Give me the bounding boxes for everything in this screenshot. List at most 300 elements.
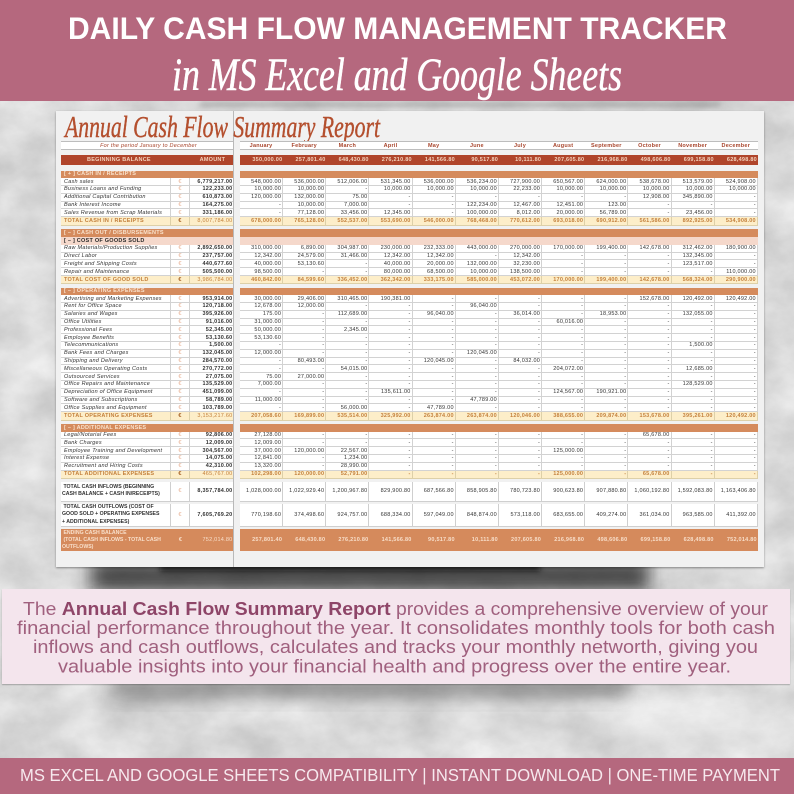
section: operating expenses: € bbox=[178, 405, 182, 411]
section: cash in / receipts: - bbox=[452, 210, 454, 216]
beginning balance row: 207,605.80 bbox=[554, 157, 584, 163]
section: operating expenses: 30,000.00 bbox=[254, 296, 281, 302]
section: operating expenses: - bbox=[322, 389, 324, 395]
beginning balance row: 628,498.80 bbox=[727, 157, 757, 163]
description text bbox=[17, 599, 775, 676]
description text: inflows and cash outflows, calculates and tracks your monthly networth, giving you bbox=[33, 637, 758, 657]
section: operating expenses: 132,045.00 bbox=[202, 350, 232, 356]
section: operating expenses: 132,055.00 bbox=[683, 311, 713, 317]
section: operating expenses: - bbox=[452, 342, 454, 348]
section: additional expenses: - bbox=[409, 455, 411, 461]
section: cash in / receipts: Sales Revenue from Scrap Materials bbox=[64, 210, 162, 216]
beginning balance row: 257,801.40 bbox=[296, 157, 326, 163]
section: additional expenses: € bbox=[178, 448, 182, 454]
section: additional expenses: 1,234.00 bbox=[344, 455, 367, 461]
section: additional expenses: € bbox=[178, 455, 182, 461]
section: cash out / cost of goods sold: - bbox=[365, 269, 367, 275]
section: additional expenses: 120,000.00 bbox=[294, 471, 324, 477]
section: additional expenses: Bank Charges bbox=[64, 440, 102, 446]
section: operating expenses: 953,914.00 bbox=[202, 296, 232, 302]
section: cash out / cost of goods sold: 3,986,784.00 bbox=[197, 277, 232, 283]
section: operating expenses: - bbox=[581, 358, 583, 364]
section: operating expenses: - bbox=[624, 358, 626, 364]
section: cash out / cost of goods sold: - bbox=[365, 261, 367, 267]
section: cash in / receipts: - bbox=[452, 194, 454, 200]
section: cash in / receipts: 534,908.00 bbox=[726, 218, 756, 224]
section: operating expenses: 325,992.00 bbox=[381, 413, 411, 419]
section: cash out / cost of goods sold: Freight and Shipping Costs bbox=[64, 261, 137, 267]
section: cash out / cost of goods sold: 312,462.00 bbox=[683, 245, 713, 251]
section: operating expenses: - bbox=[452, 374, 454, 380]
section: cash in / receipts: - bbox=[667, 210, 670, 216]
section: cash in / receipts: 6,779,217.00 bbox=[197, 179, 232, 185]
section: operating expenses: 190,381.00 bbox=[381, 296, 411, 302]
section: additional expenses: - bbox=[409, 463, 411, 469]
section: operating expenses: - bbox=[667, 397, 670, 403]
section: operating expenses: - bbox=[754, 397, 756, 403]
section: operating expenses: - bbox=[581, 342, 583, 348]
section: operating expenses: - bbox=[538, 397, 540, 403]
section: operating expenses: 124,567.00 bbox=[553, 389, 583, 395]
section: operating expenses: 29,406.00 bbox=[298, 296, 324, 302]
section: additional expenses: - bbox=[754, 471, 756, 477]
section: cash out / cost of goods sold: 333,175.00 bbox=[424, 277, 454, 283]
section: cash out / cost of goods sold: - bbox=[711, 269, 713, 275]
section: operating expenses: - bbox=[452, 381, 454, 387]
section: additional expenses: - bbox=[754, 455, 756, 461]
section: cash out / cost of goods sold: 10,000.00 bbox=[470, 269, 497, 275]
section: additional expenses: Interest Expense bbox=[64, 455, 109, 461]
row: total cash outflows: 374,498.60 bbox=[294, 512, 324, 518]
section: cash out / cost of goods sold: 505,500.00 bbox=[202, 269, 232, 275]
section: cash in / receipts: - bbox=[279, 202, 281, 208]
section: cash in / receipts: 8,012.00 bbox=[517, 210, 540, 216]
period and month header row: October bbox=[638, 142, 661, 148]
section: operating expenses: Office Supplies and Equipment bbox=[64, 405, 147, 411]
section: operating expenses: - bbox=[667, 389, 670, 395]
section: operating expenses: - bbox=[495, 335, 497, 341]
section: operating expenses: € bbox=[178, 389, 182, 395]
section: operating expenses: 50,000.00 bbox=[254, 327, 281, 333]
section: additional expenses: - bbox=[322, 455, 324, 461]
section: cash in / receipts: 122,234.00 bbox=[467, 202, 497, 208]
section: operating expenses: - bbox=[538, 319, 540, 325]
section: cash out / cost of goods sold: 310,000.00 bbox=[251, 245, 281, 251]
section: operating expenses: - bbox=[667, 381, 670, 387]
period and month header row: June bbox=[470, 142, 484, 148]
section: operating expenses: Software and Subscriptions bbox=[64, 397, 137, 403]
section: operating expenses: - bbox=[711, 350, 713, 356]
section: operating expenses: € bbox=[178, 311, 182, 317]
section: operating expenses: 310,465.00 bbox=[337, 296, 367, 302]
section: operating expenses: - bbox=[452, 366, 454, 372]
description text: valuable insights into your financial health and progress over the entire year. bbox=[58, 656, 731, 676]
section: cash out / cost of goods sold: 40,000.00 bbox=[384, 261, 411, 267]
row: ending cash balance: OUTFLOWS) bbox=[62, 544, 93, 550]
section: operating expenses: - bbox=[667, 303, 670, 309]
section: cash in / receipts: - bbox=[754, 210, 756, 216]
section: operating expenses: € bbox=[178, 381, 182, 387]
section: cash out / cost of goods sold: - bbox=[322, 269, 324, 275]
row: total cash outflows: 683,655.00 bbox=[553, 512, 583, 518]
section: additional expenses: - bbox=[538, 463, 540, 469]
section: cash out / cost of goods sold: 2,892,650.00 bbox=[197, 245, 232, 251]
section: operating expenses: Bank Fees and Charges bbox=[64, 350, 129, 356]
section: operating expenses: 120,492.00 bbox=[726, 413, 756, 419]
section: cash out / cost of goods sold: 290,900.00 bbox=[726, 277, 756, 283]
section: cash in / receipts: 10,000.00 bbox=[557, 186, 583, 192]
section: operating expenses: - bbox=[667, 358, 670, 364]
section: operating expenses: Telecommunications bbox=[64, 342, 118, 348]
section: cash in / receipts: 20,000.00 bbox=[557, 210, 583, 216]
section: operating expenses: - bbox=[495, 342, 497, 348]
section: operating expenses: 2,345.00 bbox=[344, 327, 367, 333]
section: cash in / receipts: € bbox=[178, 202, 182, 208]
section: operating expenses: - bbox=[365, 319, 367, 325]
section: cash in / receipts: 892,925.00 bbox=[683, 218, 713, 224]
section: cash in / receipts: 33,456.00 bbox=[341, 210, 367, 216]
section: operating expenses: 36,014.00 bbox=[513, 311, 540, 317]
section: cash in / receipts: - bbox=[667, 202, 670, 208]
section: cash out / cost of goods sold: - bbox=[581, 261, 583, 267]
section: cash in / receipts: 524,908.00 bbox=[726, 179, 756, 185]
section: additional expenses: - bbox=[711, 448, 713, 454]
section: operating expenses: - bbox=[754, 389, 756, 395]
section: additional expenses: 27,128.00 bbox=[254, 432, 281, 438]
section: operating expenses: 395,261.00 bbox=[683, 413, 713, 419]
section: cash in / receipts: € bbox=[178, 194, 182, 200]
section: cash out / cost of goods sold: 453,072.00 bbox=[510, 277, 540, 283]
section: additional expenses: - bbox=[409, 432, 411, 438]
section: operating expenses: - bbox=[365, 389, 367, 395]
section: cash out / cost of goods sold: - bbox=[624, 253, 626, 259]
row: total cash inflows: CASH BALANCE + CASH IN/RECEIPTS) bbox=[62, 491, 160, 497]
period and month header row: December bbox=[721, 142, 750, 148]
section: operating expenses: - bbox=[754, 358, 756, 364]
section: operating expenses: Employee Benefits bbox=[64, 335, 114, 341]
row: total cash inflows: 907,880.80 bbox=[596, 488, 626, 494]
row: ending cash balance: 257,801.40 bbox=[252, 537, 282, 543]
section: cash in / receipts: 56,789.00 bbox=[600, 210, 626, 216]
section: operating expenses: 53,130.60 bbox=[254, 335, 281, 341]
section: operating expenses: - bbox=[495, 389, 497, 395]
section: operating expenses: 96,040.00 bbox=[470, 303, 497, 309]
row: ending cash balance: (TOTAL CASH INFLOWS - TOTAL CASH bbox=[63, 537, 161, 543]
section: operating expenses: 12,000.00 bbox=[254, 350, 281, 356]
section: operating expenses: - bbox=[581, 311, 583, 317]
subtitle: in MS Excel and Google Sheets: in MS Excel and Google Sheets bbox=[172, 49, 622, 101]
section: additional expenses: - bbox=[538, 432, 540, 438]
row: total cash outflows: 597,049.00 bbox=[424, 512, 454, 518]
section: cash in / receipts: 693,018.00 bbox=[553, 218, 583, 224]
section: cash out / cost of goods sold: 53,130.60 bbox=[298, 261, 324, 267]
section: operating expenses: - bbox=[538, 342, 540, 348]
section: cash out / cost of goods sold: 362,342.00 bbox=[381, 277, 411, 283]
section: cash in / receipts: 553,690.00 bbox=[381, 218, 411, 224]
section: additional expenses: - bbox=[365, 440, 367, 446]
section: cash in / receipts: € bbox=[178, 186, 182, 192]
section: cash out / cost of goods sold: 110,000.00 bbox=[726, 269, 756, 275]
section: additional expenses: 14,075.00 bbox=[206, 455, 232, 461]
section: operating expenses: - bbox=[365, 342, 367, 348]
row: total cash outflows: 573,118.00 bbox=[510, 512, 540, 518]
section: operating expenses: - bbox=[495, 296, 497, 302]
section: operating expenses: TOTAL OPERATING EXPENSES bbox=[64, 413, 153, 419]
section: operating expenses: Office Repairs and Maintenance bbox=[64, 381, 150, 387]
section: operating expenses: - bbox=[409, 319, 411, 325]
section: operating expenses: - bbox=[754, 405, 756, 411]
section: cash in / receipts: 22,233.00 bbox=[513, 186, 540, 192]
section: operating expenses: - bbox=[365, 381, 367, 387]
section: operating expenses: € bbox=[178, 397, 182, 403]
description text: financial performance throughout the year. It consolidates monthly tools for both cash bbox=[17, 618, 775, 638]
section: operating expenses: - bbox=[538, 374, 540, 380]
row: total cash outflows: 770,198.60 bbox=[251, 512, 281, 518]
section: additional expenses: - bbox=[495, 463, 497, 469]
section: operating expenses: 395,926.00 bbox=[202, 311, 232, 317]
section: operating expenses: - bbox=[754, 366, 756, 372]
section: cash in / receipts: 120,000.00 bbox=[251, 194, 281, 200]
section: cash out / cost of goods sold: € bbox=[178, 277, 182, 283]
section: additional expenses: € bbox=[178, 471, 182, 477]
section: operating expenses: 120,492.00 bbox=[683, 296, 713, 302]
section: operating expenses: 3,153,217.60 bbox=[197, 413, 232, 419]
section: cash in / receipts: 10,000.00 bbox=[298, 186, 324, 192]
section: additional expenses: 125,000.00 bbox=[553, 448, 583, 454]
section: additional expenses: - bbox=[452, 463, 454, 469]
section: operating expenses: - bbox=[711, 389, 713, 395]
section: additional expenses: 13,320.00 bbox=[254, 463, 281, 469]
section: cash out / cost of goods sold: € bbox=[178, 253, 182, 259]
section: additional expenses: - bbox=[624, 463, 626, 469]
section: operating expenses: - bbox=[409, 342, 411, 348]
section: operating expenses: € bbox=[178, 413, 182, 419]
row: total cash inflows: 829,900.80 bbox=[381, 488, 411, 494]
row: total cash inflows: 1,163,406.80 bbox=[721, 488, 756, 494]
section: operating expenses: 388,655.00 bbox=[553, 413, 583, 419]
section: operating expenses: [ – ] OPERATING EXPENSES bbox=[64, 288, 145, 294]
section: additional expenses: - bbox=[322, 440, 324, 446]
section: operating expenses: 135,529.00 bbox=[202, 381, 232, 387]
section: cash in / receipts: - bbox=[409, 202, 411, 208]
section: operating expenses: - bbox=[711, 327, 713, 333]
row: ending cash balance: 90,517.80 bbox=[428, 537, 455, 543]
section: cash out / cost of goods sold: 199,400.00 bbox=[596, 277, 626, 283]
section: cash in / receipts: € bbox=[178, 218, 182, 224]
section: cash in / receipts: 10,000.00 bbox=[384, 186, 411, 192]
section: cash in / receipts: 538,678.00 bbox=[640, 179, 670, 185]
beginning balance row bbox=[61, 155, 758, 165]
section: operating expenses: - bbox=[624, 405, 626, 411]
section: operating expenses: - bbox=[279, 358, 281, 364]
section: cash in / receipts: 768,468.00 bbox=[467, 218, 497, 224]
section: operating expenses: € bbox=[178, 358, 182, 364]
section: cash out / cost of goods sold: - bbox=[754, 253, 756, 259]
section: operating expenses: - bbox=[538, 350, 540, 356]
section: cash in / receipts: 546,000.00 bbox=[424, 218, 454, 224]
section: additional expenses: - bbox=[495, 432, 497, 438]
section: additional expenses: - bbox=[538, 471, 540, 477]
section: operating expenses: - bbox=[624, 303, 626, 309]
section: additional expenses: 12,841.00 bbox=[254, 455, 281, 461]
section: operating expenses: 263,874.00 bbox=[467, 413, 497, 419]
section: operating expenses: - bbox=[667, 335, 670, 341]
section: cash out / cost of goods sold: Raw Materials/Production Supplies bbox=[64, 245, 158, 251]
section: operating expenses: 169,899.00 bbox=[294, 413, 324, 419]
section: operating expenses: - bbox=[624, 381, 626, 387]
row: total cash inflows: 8,357,784.00 bbox=[197, 488, 232, 494]
row: total cash outflows: 924,757.00 bbox=[337, 512, 367, 518]
section: operating expenses: - bbox=[667, 342, 670, 348]
section: operating expenses: - bbox=[624, 296, 626, 302]
section: cash in / receipts: - bbox=[581, 194, 583, 200]
split divider bbox=[233, 111, 234, 567]
section: cash in / receipts: 512,006.00 bbox=[337, 179, 367, 185]
section: cash out / cost of goods sold: 24,579.00 bbox=[298, 253, 324, 259]
section: cash out / cost of goods sold: - bbox=[581, 269, 583, 275]
section: operating expenses: 31,000.00 bbox=[254, 319, 281, 325]
section: cash in / receipts: TOTAL CASH IN / RECEIPTS bbox=[64, 218, 144, 224]
section: cash out / cost of goods sold: - bbox=[667, 261, 670, 267]
section: operating expenses: - bbox=[409, 405, 411, 411]
section: cash out / cost of goods sold: 98,500.00 bbox=[254, 269, 281, 275]
section: additional expenses: - bbox=[452, 432, 454, 438]
section: operating expenses: - bbox=[624, 366, 626, 372]
section: additional expenses: - bbox=[409, 440, 411, 446]
section: cash out / cost of goods sold: 336,452.00 bbox=[337, 277, 367, 283]
section: additional expenses: 102,298.00 bbox=[251, 471, 281, 477]
section: operating expenses: - bbox=[322, 327, 324, 333]
section: cash in / receipts: 23,456.00 bbox=[686, 210, 713, 216]
section: cash out / cost of goods sold: 68,500.00 bbox=[427, 269, 454, 275]
section: additional expenses: - bbox=[667, 440, 670, 446]
section: operating expenses: 204,072.00 bbox=[553, 366, 583, 372]
section: additional expenses: - bbox=[409, 471, 411, 477]
section: cash in / receipts: 7,000.00 bbox=[344, 202, 367, 208]
section: cash in / receipts: 531,345.00 bbox=[381, 179, 411, 185]
section: operating expenses: Salaries and Wages bbox=[64, 311, 118, 317]
section: operating expenses: 190,921.00 bbox=[596, 389, 626, 395]
section: cash out / cost of goods sold: Direct Labor bbox=[64, 253, 97, 259]
beginning balance row: 276,210.80 bbox=[382, 157, 412, 163]
section: operating expenses: - bbox=[754, 350, 756, 356]
row: total cash inflows: 1,060,192.80 bbox=[634, 488, 670, 494]
row: total cash outflows: GOOD SOLD + OPERATING EXPENSES bbox=[62, 511, 159, 517]
section: operating expenses: - bbox=[754, 303, 756, 309]
beginning balance row: 141,566.80 bbox=[425, 157, 455, 163]
section: operating expenses: - bbox=[624, 350, 626, 356]
section: cash in / receipts: 12,467.00 bbox=[513, 202, 540, 208]
row: total cash inflows: 900,623.80 bbox=[553, 488, 583, 494]
section: operating expenses: 120,045.00 bbox=[467, 350, 497, 356]
section: operating expenses: € bbox=[178, 296, 182, 302]
section: cash in / receipts: 10,000.00 bbox=[643, 186, 670, 192]
period and month header row: January bbox=[250, 142, 272, 148]
section: cash in / receipts: - bbox=[538, 194, 540, 200]
period and month header row: November bbox=[678, 142, 707, 148]
section: cash in / receipts: - bbox=[495, 194, 497, 200]
section: operating expenses: Office Utilities bbox=[64, 319, 102, 325]
section: additional expenses: - bbox=[322, 463, 324, 469]
section: operating expenses: - bbox=[667, 350, 670, 356]
section: additional expenses: € bbox=[178, 463, 182, 469]
section: cash out / cost of goods sold: [ – ] COST OF GOODS SOLD bbox=[64, 238, 145, 244]
section: cash out / cost of goods sold: 80,000.00 bbox=[384, 269, 411, 275]
section: operating expenses: - bbox=[365, 303, 367, 309]
section: operating expenses: Shipping and Delivery bbox=[64, 358, 123, 364]
section: cash out / cost of goods sold: Repair and Maintenance bbox=[64, 269, 129, 275]
section: additional expenses: - bbox=[667, 463, 670, 469]
row: total cash inflows: TOTAL CASH INFLOWS (BEGINNING bbox=[63, 484, 154, 490]
section: operating expenses: - bbox=[495, 405, 497, 411]
section: cash in / receipts: - bbox=[365, 186, 367, 192]
section: operating expenses: - bbox=[711, 397, 713, 403]
section: additional expenses: - bbox=[452, 440, 454, 446]
section: operating expenses: - bbox=[279, 405, 281, 411]
section: operating expenses: - bbox=[581, 335, 583, 341]
section: operating expenses: - bbox=[409, 374, 411, 380]
section: cash in / receipts: 75.00 bbox=[352, 194, 367, 200]
section: cash in / receipts: 164,275.00 bbox=[202, 202, 232, 208]
section: operating expenses: 451,099.00 bbox=[202, 389, 232, 395]
section: operating expenses: Miscellaneous Operating Costs bbox=[64, 366, 147, 372]
section: operating expenses: - bbox=[452, 397, 454, 403]
section: cash in / receipts: 690,912.00 bbox=[596, 218, 626, 224]
section: operating expenses: 135,611.00 bbox=[381, 389, 411, 395]
section: cash in / receipts: 536,000.00 bbox=[294, 179, 324, 185]
section: operating expenses: - bbox=[452, 335, 454, 341]
section: cash out / cost of goods sold: € bbox=[178, 261, 182, 267]
section: cash in / receipts: - bbox=[754, 194, 756, 200]
beginning balance row: 90,517.80 bbox=[471, 157, 498, 163]
section: additional expenses: - bbox=[495, 448, 497, 454]
section: cash out / cost of goods sold: 6,890.00 bbox=[301, 245, 324, 251]
section: additional expenses: - bbox=[711, 463, 713, 469]
section: cash out / cost of goods sold: 132,345.00 bbox=[683, 253, 713, 259]
section: operating expenses: 175.00 bbox=[263, 311, 281, 317]
section: operating expenses: 52,345.00 bbox=[206, 327, 232, 333]
row: ending cash balance: 141,566.80 bbox=[382, 537, 412, 543]
section: operating expenses: - bbox=[754, 335, 756, 341]
section: additional expenses: - bbox=[538, 440, 540, 446]
section: cash in / receipts: Business Loans and Funding bbox=[64, 186, 141, 192]
section: additional expenses: - bbox=[624, 440, 626, 446]
section: operating expenses: 270,772.00 bbox=[202, 366, 232, 372]
section: additional expenses: TOTAL ADDITIONAL EXPENSES bbox=[64, 471, 154, 477]
section: operating expenses: - bbox=[538, 381, 540, 387]
section: cash out / cost of goods sold: 232,333.00 bbox=[424, 245, 454, 251]
section: cash out / cost of goods sold: 443,000.00 bbox=[467, 245, 497, 251]
section: operating expenses: 7,000.00 bbox=[258, 381, 281, 387]
row: ending cash balance: € bbox=[179, 537, 182, 543]
row: ending cash balance: 752,014.80 bbox=[202, 537, 232, 543]
section: operating expenses: 80,493.00 bbox=[298, 358, 324, 364]
section: cash out / cost of goods sold: € bbox=[178, 245, 182, 251]
section: operating expenses: - bbox=[754, 374, 756, 380]
section: operating expenses: 56,000.00 bbox=[341, 405, 367, 411]
section: operating expenses: - bbox=[452, 327, 454, 333]
section: cash out / cost of goods sold: - bbox=[754, 261, 756, 267]
section: cash in / receipts: 77,128.00 bbox=[298, 210, 324, 216]
section: cash out / cost of goods sold: - bbox=[581, 253, 583, 259]
section: operating expenses: - bbox=[667, 311, 670, 317]
section: operating expenses: - bbox=[452, 319, 454, 325]
section: operating expenses: - bbox=[322, 319, 324, 325]
section: operating expenses: 60,016.00 bbox=[557, 319, 583, 325]
section: operating expenses: - bbox=[452, 296, 454, 302]
section: cash in / receipts: - bbox=[754, 202, 756, 208]
section: operating expenses: 91,016.00 bbox=[206, 319, 232, 325]
